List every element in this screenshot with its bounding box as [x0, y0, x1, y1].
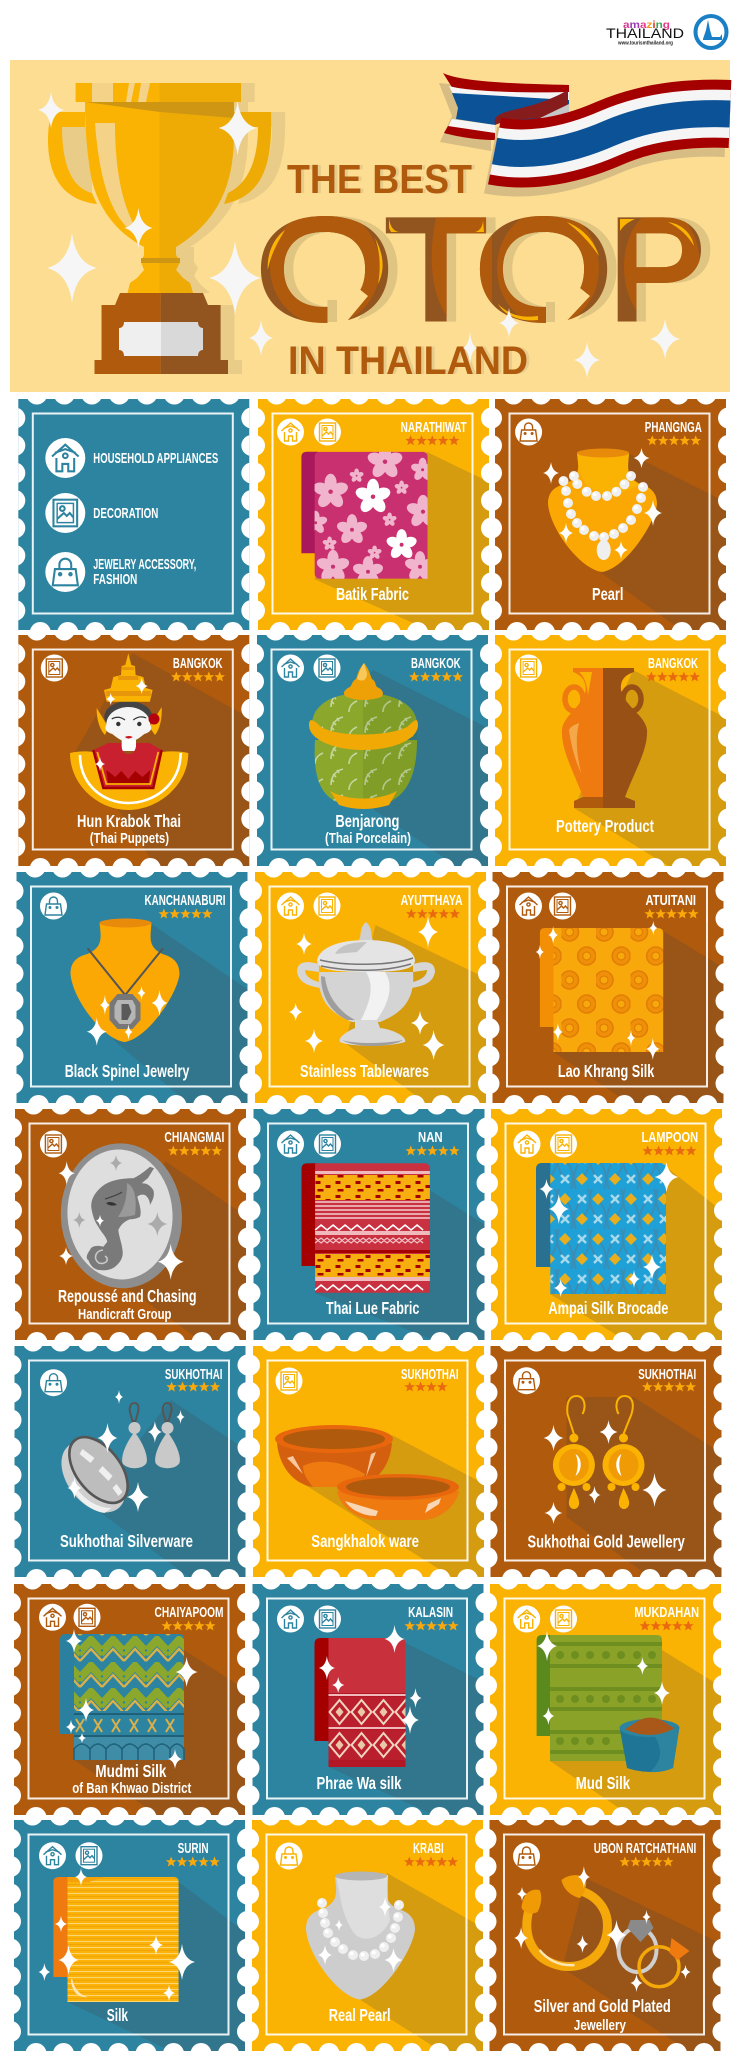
- card: Lao Khrang Silk: [492, 872, 724, 1103]
- card: Pottery Product: [495, 635, 726, 866]
- card: Real Pearl: [252, 1820, 483, 2051]
- fabric: [60, 1634, 184, 1760]
- title: OTOP: O: [475, 189, 613, 350]
- logo: amazing Thailand: www.tourismthailand.org: [617, 40, 673, 46]
- title: OTOP: O: [475, 189, 613, 350]
- header panel: [10, 60, 730, 392]
- title sparkles: [463, 308, 519, 365]
- icons: [277, 418, 341, 446]
- trophy: [48, 83, 285, 374]
- rating: [406, 908, 460, 918]
- title: OTOP: P: [618, 189, 716, 350]
- card: Phrae Wa silk: [252, 1584, 484, 1815]
- location: ATUITANI: [646, 892, 696, 909]
- location: BANGKOK: [648, 655, 698, 672]
- location: LAMPOON: [642, 1129, 698, 1146]
- card: Repousse and Chasing: [15, 1109, 246, 1340]
- porcelain jar: [309, 663, 418, 809]
- sparkles: [66, 1629, 198, 1769]
- title: Mudmi Silk: [95, 1761, 167, 1781]
- title: Handicraft Group: [78, 1306, 172, 1323]
- flag ribbon: [439, 73, 730, 162]
- white sparkles: [59, 1161, 184, 1280]
- sparkles: [514, 1866, 690, 1992]
- rating: [620, 1856, 674, 1866]
- icons: [39, 1842, 102, 1869]
- logo: amazing Thailand: THAILAND: [606, 25, 684, 41]
- sparkles: [540, 1162, 678, 1297]
- legend: jewelry accessory, fashion: JEWELRY ACCESSORY,: [93, 556, 196, 573]
- title: Sukhothai Gold Jewellery: [528, 1532, 685, 1552]
- sparkles: [87, 986, 168, 1046]
- title: OTOP: T: [385, 189, 487, 350]
- fabric illustration: [301, 444, 441, 587]
- icons: [277, 654, 340, 682]
- title: Repoussé and Chasing: [58, 1286, 196, 1306]
- icon: [40, 1130, 67, 1158]
- title: Real Pearl: [329, 2005, 391, 2025]
- location: NAN: [418, 1129, 443, 1146]
- title: Ampai Silk Brocade: [548, 1298, 669, 1318]
- sparkles: [289, 916, 445, 1060]
- rating: [162, 1620, 216, 1630]
- card: Batik Fabric: [258, 399, 489, 630]
- logo: amazing Thailand: [606, 20, 684, 46]
- title: Jewellery: [574, 2017, 626, 2034]
- fabric: [53, 1877, 179, 2002]
- location: MUKDAHAN: [634, 1604, 699, 1621]
- title: Black Spinel Jewelry: [65, 1061, 190, 1081]
- icon: [40, 1369, 67, 1396]
- logo: tourism authority seal: [696, 16, 726, 48]
- title: OTOP: T: [394, 189, 496, 350]
- title: [325, 811, 411, 847]
- fabric: [540, 928, 663, 1052]
- title: the best: THE BEST: [290, 156, 475, 202]
- silver tureen: [297, 922, 435, 1046]
- legend: decoration: [45, 493, 158, 533]
- title: Benjarong: [335, 811, 399, 831]
- thai puppet: [70, 653, 188, 810]
- legend: household appliances: HOUSEHOLD APPLIANCES: [93, 450, 218, 467]
- title: (Thai Puppets): [90, 830, 169, 847]
- rating: [158, 908, 212, 918]
- card: Silk: [14, 1820, 245, 2051]
- card: Ampai Silk Brocade: [491, 1109, 722, 1340]
- location: SURIN: [178, 1840, 209, 1857]
- card: Thai Lue Fabric: [254, 1109, 484, 1340]
- title: Lao Khrang Silk: [558, 1061, 654, 1081]
- title: Sangkhalok ware: [311, 1531, 419, 1551]
- gold earrings: [553, 1396, 644, 1509]
- sparkles: [95, 678, 148, 771]
- title: Thai Lue Fabric: [326, 1298, 420, 1318]
- title: Batik Fabric: [336, 584, 409, 604]
- icons: [277, 1130, 341, 1158]
- icon: [276, 1842, 302, 1870]
- fabric: [302, 1163, 430, 1293]
- rating: [166, 1382, 220, 1392]
- location: KANCHANABURI: [144, 892, 226, 909]
- title: Hun Krabok Thai: [77, 811, 181, 831]
- card: Mud Silk: [490, 1584, 721, 1815]
- title: OTOP: T: [385, 189, 487, 350]
- sparkles: [544, 1420, 666, 1524]
- card: Black Spinel Jewelry: [16, 872, 248, 1103]
- card: Stainless Tablewares: [255, 872, 486, 1103]
- sparkles: [318, 1897, 402, 1972]
- rating: [644, 908, 698, 918]
- icons: [513, 1606, 577, 1632]
- title: Mud Silk: [576, 1773, 630, 1793]
- rating: [406, 1146, 460, 1156]
- silver ganesha medallion: [56, 1139, 187, 1292]
- sparkles: [38, 1868, 195, 2001]
- title: OTOP: O: [265, 189, 403, 350]
- bust with pearl necklace: [548, 448, 657, 572]
- rating: [642, 1146, 696, 1156]
- location: SUKHOTHAI: [401, 1366, 459, 1383]
- title: Silver and Gold Plated: [534, 1996, 671, 2016]
- title: of Ban Khwao District: [72, 1780, 191, 1797]
- title: OTOP: P: [608, 189, 706, 350]
- card: Silver and Gold Plated Jewellery: [490, 1820, 720, 2051]
- icon: [513, 1367, 540, 1394]
- rating: [404, 1382, 448, 1392]
- card: legend: [4, 384, 262, 643]
- sparkles: [68, 1390, 184, 1512]
- rating: [647, 435, 701, 445]
- title: OTOP: O: [484, 189, 622, 350]
- rating: [640, 1620, 694, 1630]
- title: OTOP: O: [256, 189, 394, 350]
- card: Sukhothai Silverware: [14, 1346, 246, 1577]
- title: [77, 811, 181, 847]
- icons: [277, 892, 340, 920]
- rating: [168, 1146, 222, 1156]
- title: OTOP: P: [608, 189, 706, 350]
- icon: [513, 1842, 540, 1870]
- location: NARATHIWAT: [401, 419, 467, 436]
- legend: jewelry accessory, fashion: [45, 552, 196, 592]
- icon: [276, 1368, 302, 1394]
- fabric: [314, 1638, 406, 1767]
- card: Sangkhalok ware: [253, 1346, 484, 1577]
- card: Pearl: [495, 399, 726, 630]
- bust with spinel: [70, 918, 180, 1042]
- sparkles: [319, 1625, 422, 1734]
- title: OTOP: O: [256, 189, 394, 350]
- rating: [404, 1620, 458, 1630]
- title: OTOP: [260, 216, 710, 323]
- clay bowls: [275, 1425, 459, 1520]
- silver bangle and earrings: [48, 1403, 180, 1525]
- rating: [166, 1856, 220, 1866]
- location: CHAIYAPOOM: [154, 1604, 224, 1621]
- title: Pearl: [592, 584, 624, 604]
- icons: [515, 892, 576, 920]
- title: Stainless Tablewares: [300, 1061, 429, 1081]
- icons: [39, 1604, 100, 1631]
- sparkles: [543, 448, 662, 559]
- title: the best: THE BEST: [287, 156, 472, 202]
- location: AYUTTHAYA: [401, 892, 463, 909]
- fabric and mud bucket: [537, 1635, 680, 1772]
- card: Benjarong: [257, 635, 488, 866]
- card: Mudmi Silk: [14, 1584, 245, 1815]
- location: BANGKOK: [173, 655, 223, 672]
- bangle and rings: [522, 1875, 690, 1987]
- icon: [515, 418, 542, 446]
- title: Sukhothai Silverware: [60, 1531, 193, 1551]
- card: Sukhothai Gold Jewellery: [490, 1346, 722, 1577]
- bust with pearls: [306, 1872, 415, 2000]
- logo: amazing Thailand: amazing: [623, 20, 670, 31]
- icon: [515, 654, 542, 682]
- title: Silk: [107, 2005, 128, 2025]
- vase: [562, 668, 647, 808]
- icon: [40, 892, 67, 920]
- rating: [404, 1856, 458, 1866]
- title: [534, 1996, 671, 2034]
- icon: [41, 654, 68, 682]
- title: Pottery Product: [556, 816, 654, 836]
- location: SUKHOTHAI: [638, 1366, 696, 1383]
- title: (Thai Porcelain): [325, 830, 411, 847]
- location: KALASIN: [408, 1604, 453, 1621]
- location: CHIANGMAI: [164, 1129, 224, 1146]
- card: Hun Krabok Thai: [18, 635, 250, 866]
- title: [58, 1286, 196, 1323]
- location: SUKHOTHAI: [165, 1366, 222, 1383]
- legend: decoration: DECORATION: [93, 505, 158, 522]
- icons: [514, 1130, 577, 1158]
- rating: [409, 672, 463, 682]
- sparkles: [38, 92, 680, 378]
- title: in Thailand: IN THAILAND: [291, 339, 531, 383]
- location: PHANGNGA: [645, 419, 702, 436]
- location: KRABI: [413, 1840, 444, 1857]
- location: BANGKOK: [411, 655, 461, 672]
- icons: [277, 1606, 341, 1632]
- title: Phrae Wa silk: [316, 1773, 402, 1793]
- rating: [646, 672, 700, 682]
- rating: [405, 435, 459, 445]
- fabric: [536, 1163, 666, 1294]
- sparkles: [536, 921, 660, 1060]
- title: in Thailand: IN THAILAND: [288, 339, 528, 383]
- legend: jewelry accessory, fashion: FASHION: [93, 571, 137, 588]
- rating: [171, 672, 225, 682]
- rating: [642, 1382, 696, 1392]
- legend: household appliances: [45, 438, 218, 478]
- title: [72, 1761, 191, 1797]
- sparkles: [73, 1155, 167, 1236]
- sparkles: [537, 1631, 670, 1725]
